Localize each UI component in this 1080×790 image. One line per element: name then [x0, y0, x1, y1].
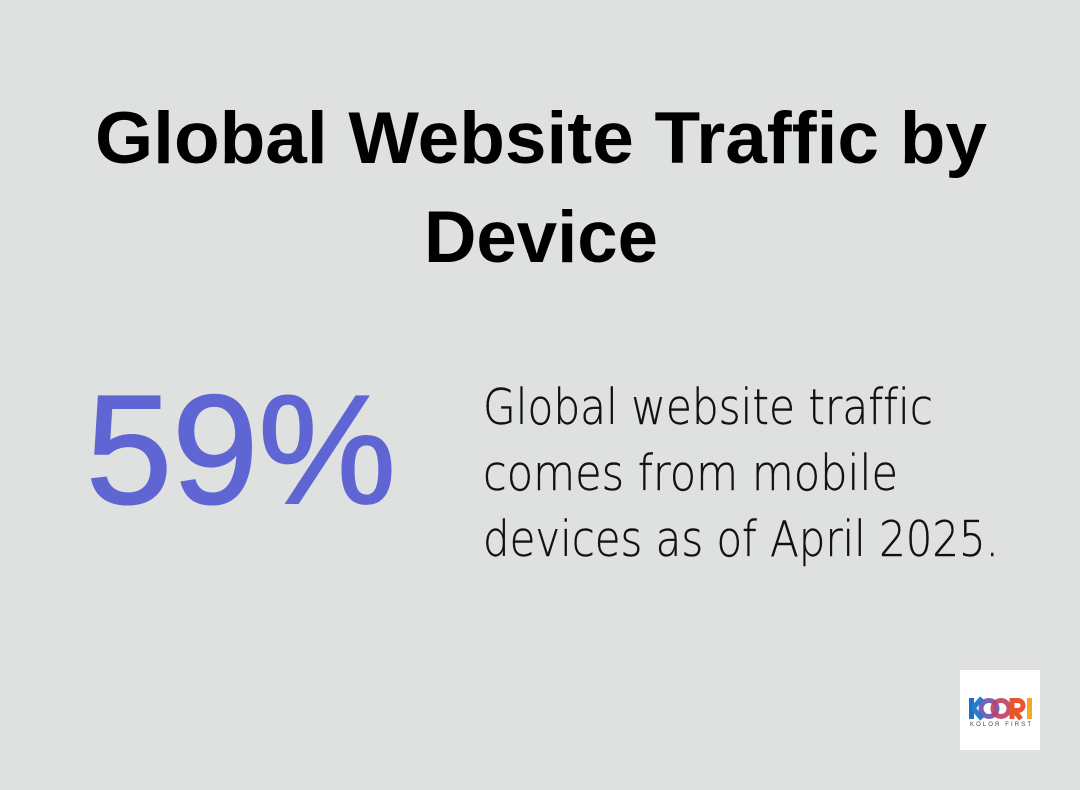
logo: Koori Kolor First	[960, 670, 1040, 750]
logo: Koori Kolor First: KOLOR FIRST	[970, 722, 1031, 728]
description text: Global website traffic	[483, 379, 933, 436]
title: Global Website Traffic by	[95, 98, 987, 179]
description text	[483, 379, 999, 568]
big statistic: 59%: 59%	[86, 363, 396, 536]
title	[95, 98, 987, 278]
description text: comes from mobile	[483, 445, 898, 502]
description text: devices as of April 2025.	[483, 511, 999, 568]
title: Device	[424, 197, 658, 278]
